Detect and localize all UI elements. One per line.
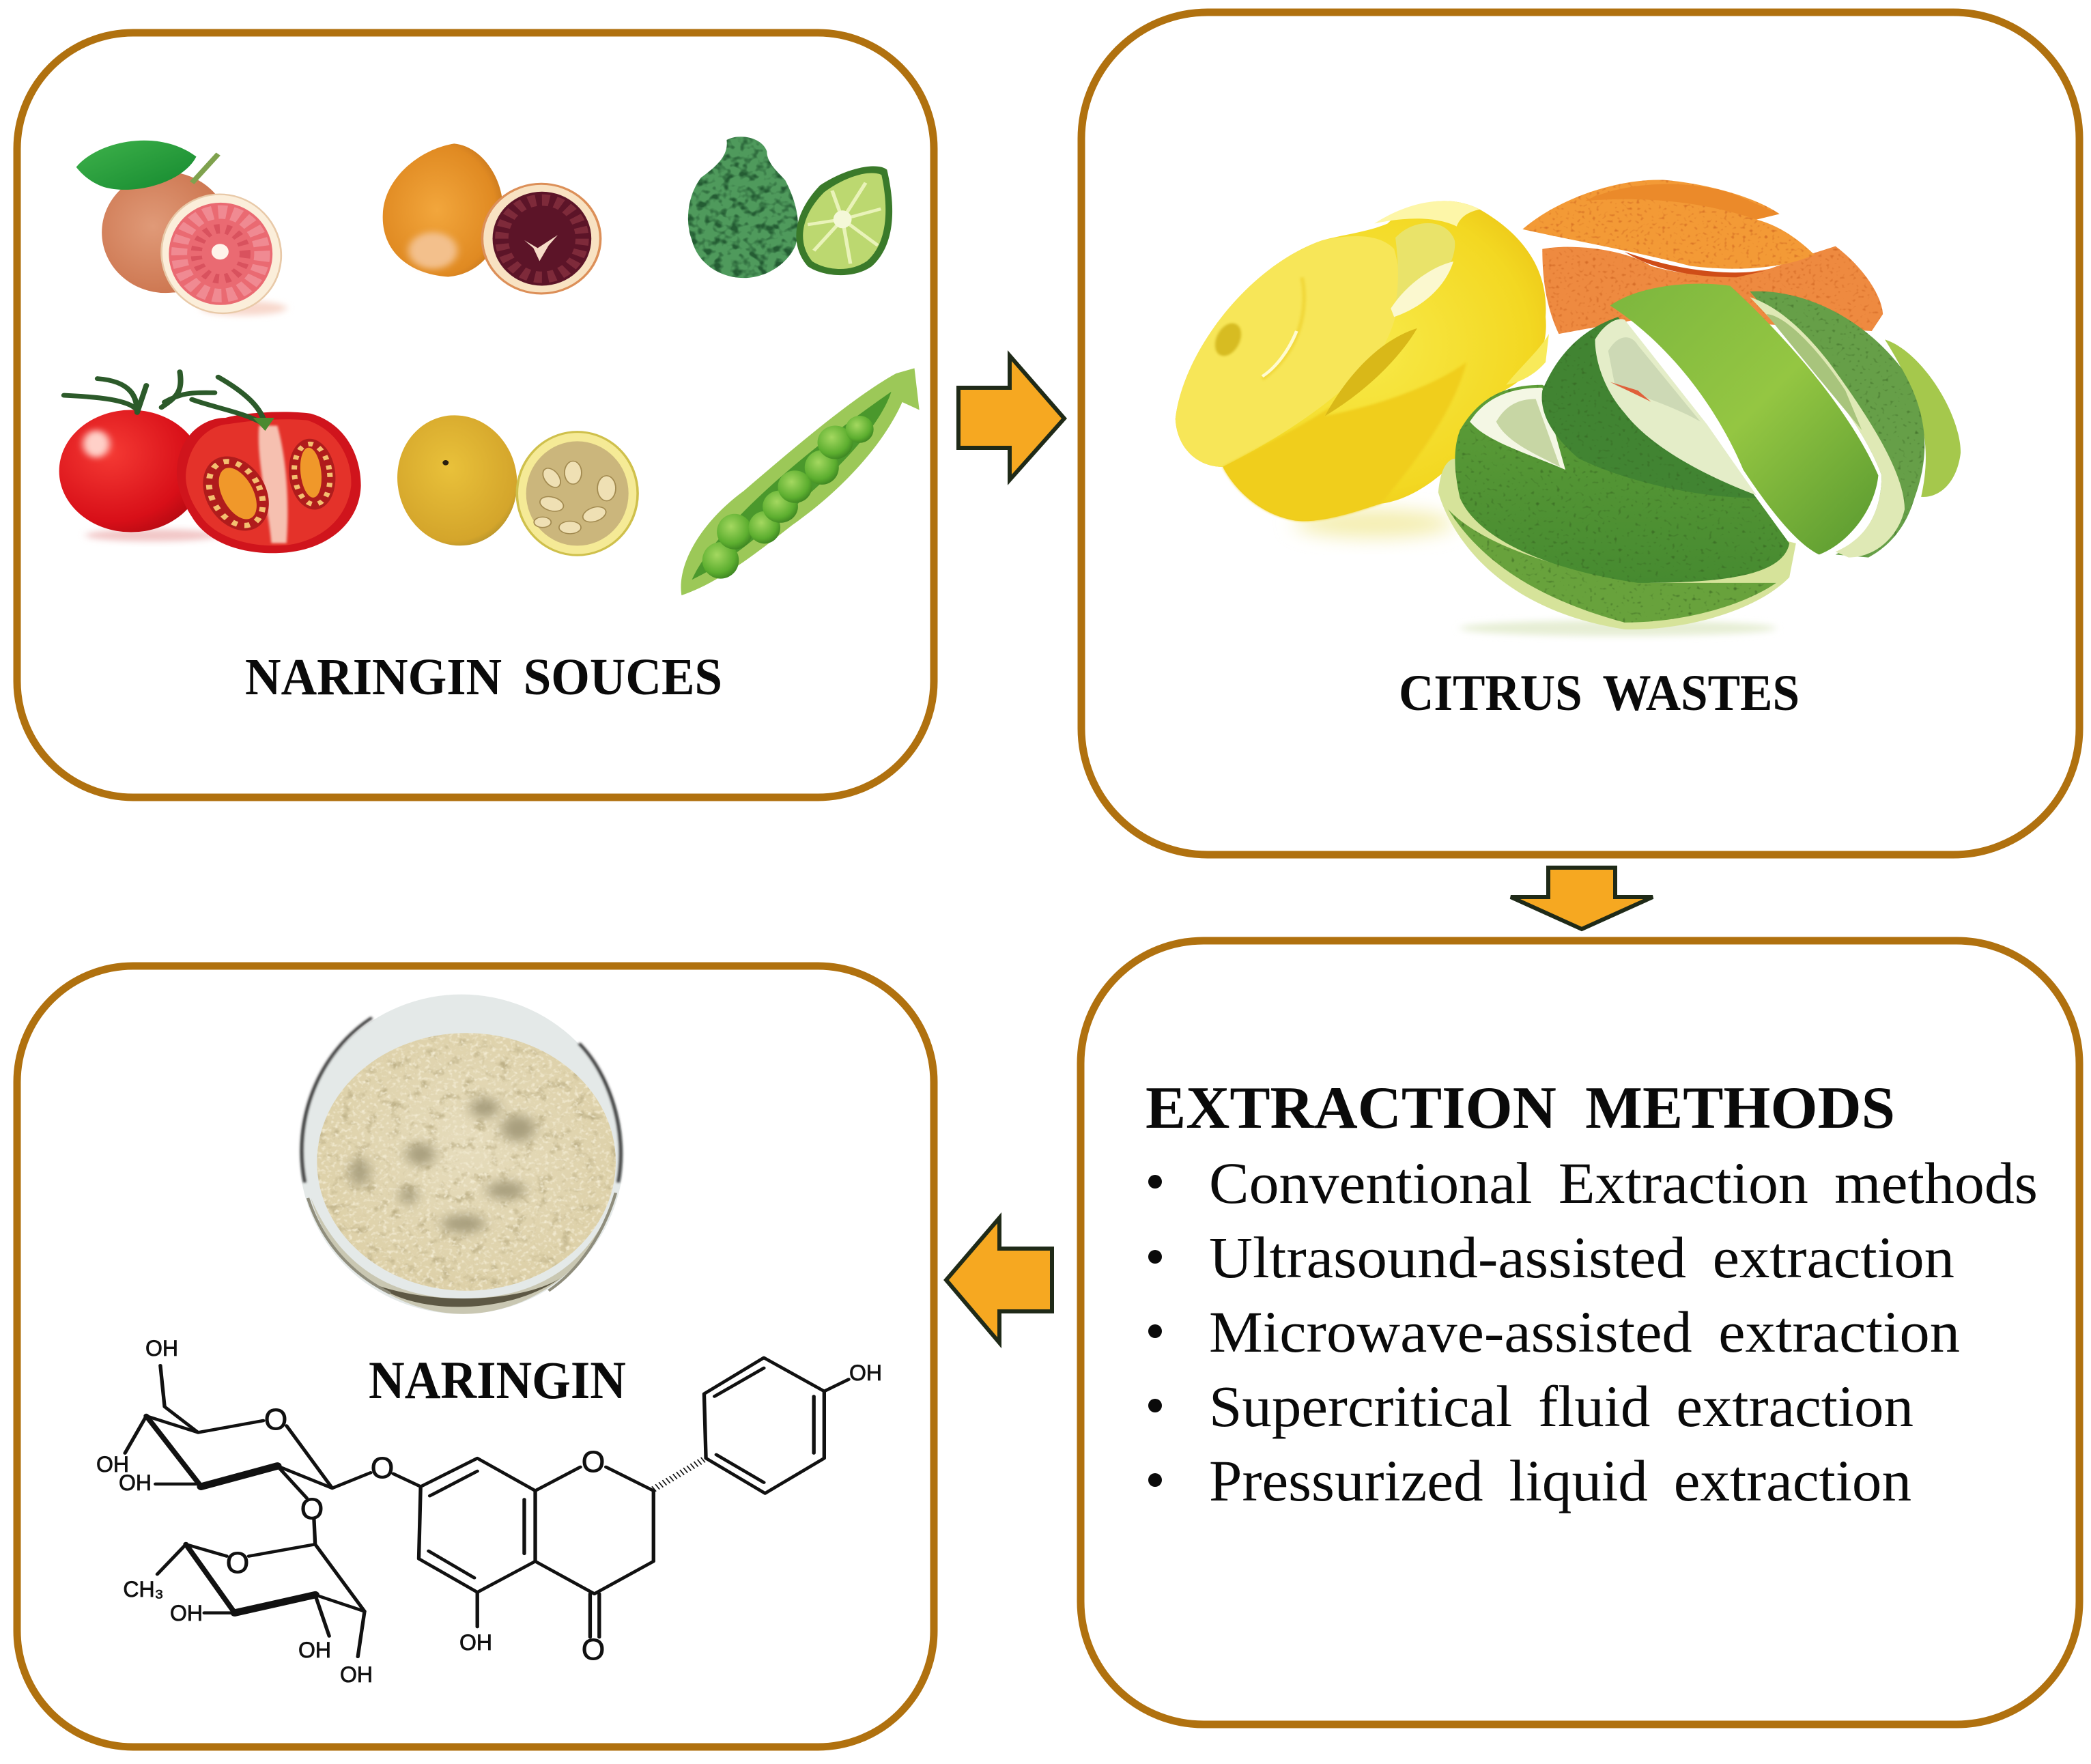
icon: yellow fruit (391, 411, 638, 555)
arrow: wastes to extraction (1511, 868, 1653, 929)
label: hydroxyl groups: CH₃ (123, 1577, 164, 1602)
heading: naringin sources: NARINGIN SOUCES (245, 649, 722, 706)
arrow: extraction to naringin (946, 1218, 1052, 1343)
label: ring oxygens: O (264, 1403, 287, 1436)
panel: naringin (17, 966, 934, 1747)
label: hydroxyl groups: OH (96, 1452, 129, 1477)
icon: dish of naringin powder (299, 995, 624, 1314)
label: hydroxyl groups: OH (340, 1662, 373, 1687)
label: hydroxyl groups: OH (459, 1630, 492, 1655)
chart: naringin molecular structure (96, 1336, 882, 1687)
icon: bergamot (688, 137, 892, 278)
arrow: sources to wastes (958, 356, 1064, 480)
label: hydroxyl groups: OH (119, 1470, 152, 1495)
label: ring oxygens: O (582, 1445, 605, 1479)
label: hydroxyl groups: OH (298, 1638, 331, 1662)
heading: citrus wastes: CITRUS WASTES (1399, 665, 1800, 722)
label: ring oxygens: O (300, 1492, 324, 1526)
icon: blood orange (383, 143, 601, 294)
panel: citrus wastes (1081, 12, 2079, 855)
list: extraction method items: Pressurized liquid extraction (1209, 1448, 1911, 1513)
heading: extraction methods: EXTRACTION METHODS (1146, 1075, 1895, 1141)
list: extraction method items: Ultrasound-assisted extraction (1209, 1225, 1954, 1290)
list: extraction method items (1148, 1150, 2038, 1513)
label: ring oxygens (226, 1403, 605, 1666)
list: extraction method items: Conventional Extraction methods (1209, 1150, 2038, 1216)
icon: grapefruit (76, 141, 287, 317)
panel: naringin sources (17, 33, 934, 797)
label: hydroxyl groups (96, 1336, 882, 1687)
list: extraction method items: Microwave-assisted extraction (1209, 1299, 1960, 1365)
label: hydroxyl groups: OH (849, 1361, 882, 1385)
panel: extraction methods (1081, 941, 2079, 1724)
list: extraction method items: Supercritical fluid extraction (1209, 1374, 1914, 1439)
label: ring oxygens: O (226, 1546, 249, 1580)
label: hydroxyl groups: OH (145, 1336, 178, 1361)
icon: pea pod (681, 368, 920, 595)
label: hydroxyl groups: OH (170, 1601, 203, 1625)
icon: tomatoes (59, 372, 361, 553)
label: ring oxygens: O (371, 1451, 394, 1485)
heading: naringin: NARINGIN (369, 1350, 626, 1410)
icon: pile of citrus peels (1176, 180, 1961, 636)
label: ring oxygens: O (582, 1633, 605, 1666)
